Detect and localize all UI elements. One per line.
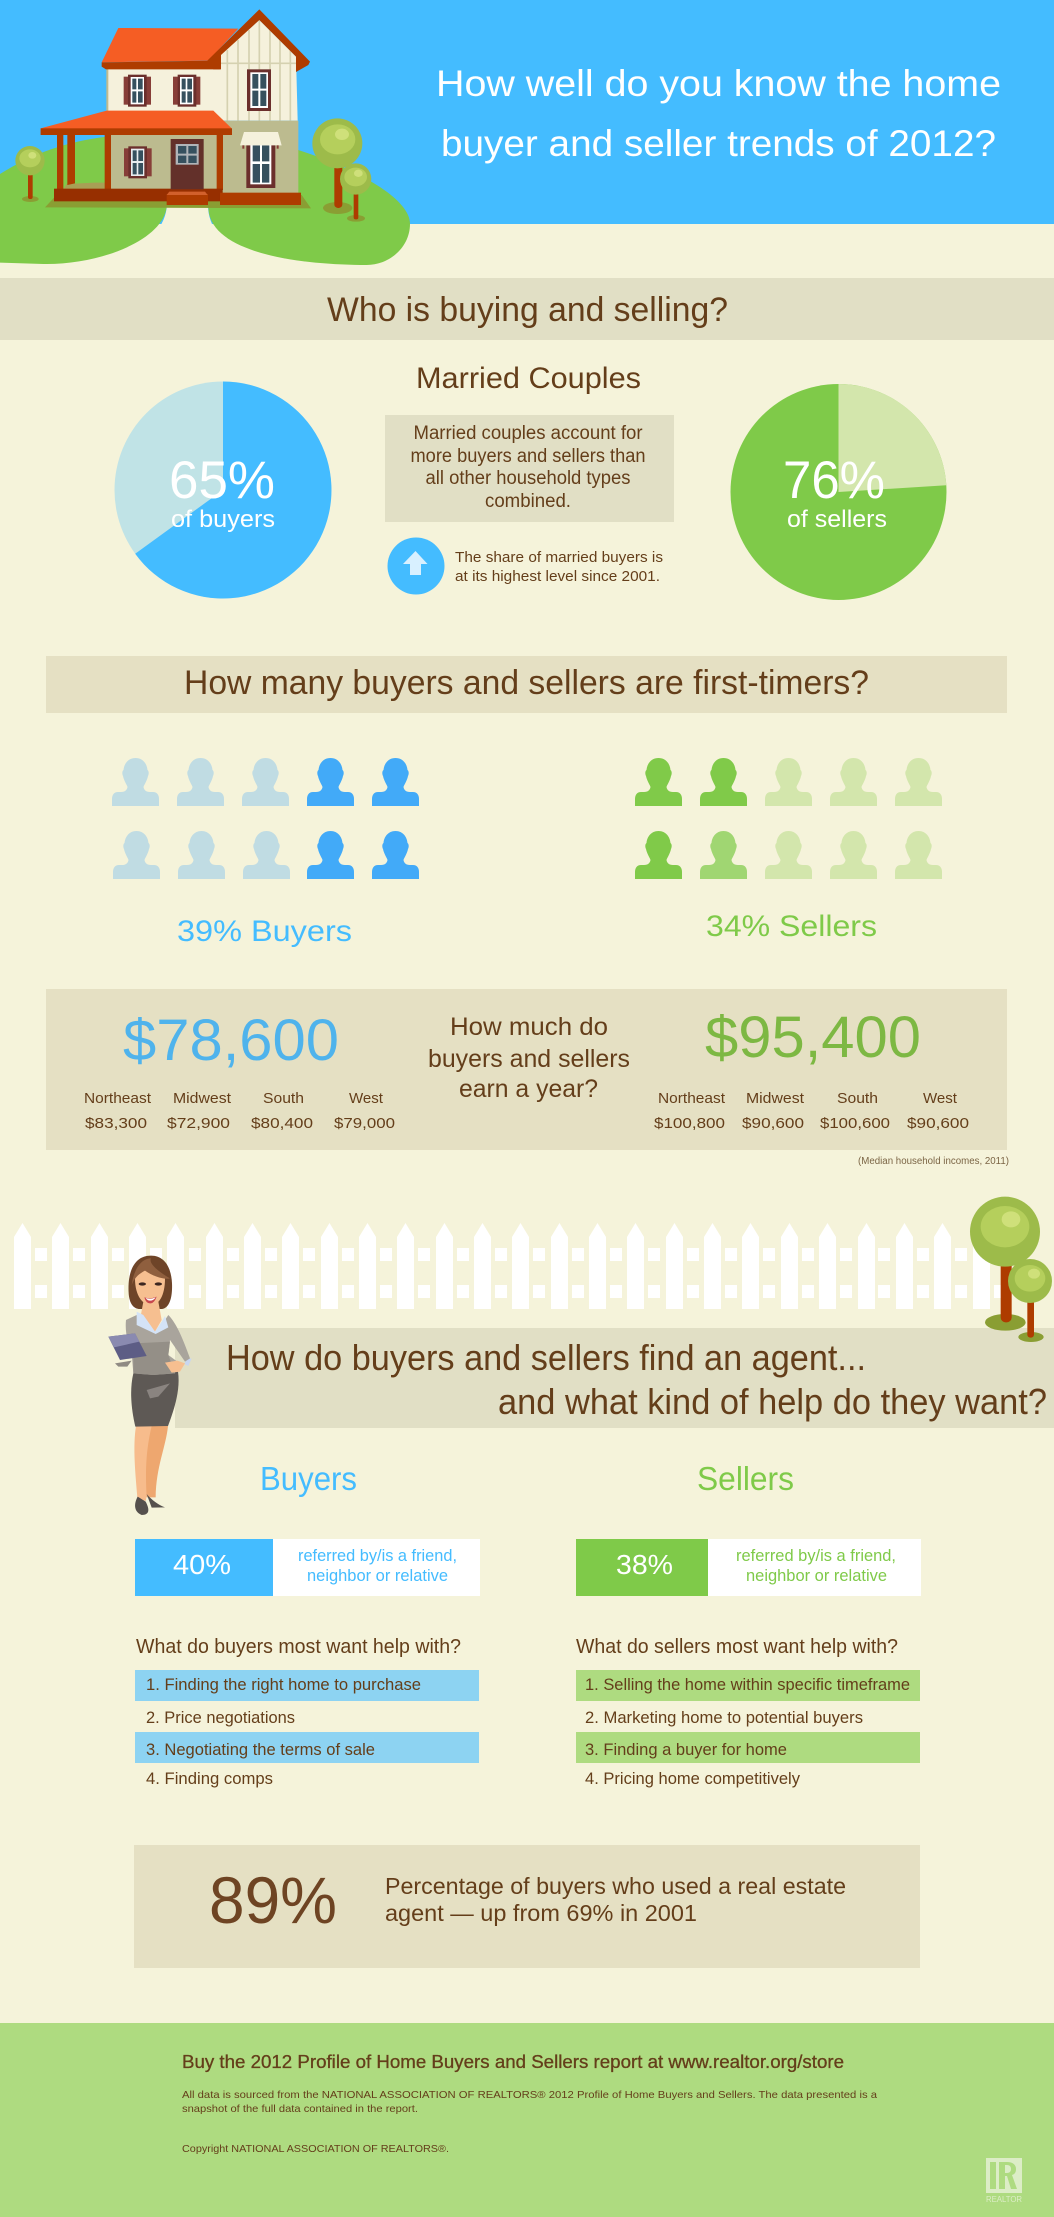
list: what buyers want help with: 2. Price negotiations xyxy=(146,1708,295,1727)
chart: buyers pie 65%: 65% xyxy=(169,451,275,510)
sellers regional incomes: Northeast xyxy=(658,1090,726,1107)
buyers regional incomes: $79,000 xyxy=(334,1115,395,1132)
title: buyer and seller trends of 2012? xyxy=(441,123,996,164)
icon: realtor logo: REALTOR xyxy=(986,2195,1022,2204)
heading: first-timers xyxy=(46,656,1007,713)
sellers regional incomes: West xyxy=(923,1090,958,1107)
list: what buyers want help with: What do buyers most want help with? xyxy=(136,1636,461,1658)
list: what buyers want help with xyxy=(135,1636,479,1788)
callout: sellers 38% referred xyxy=(576,1539,921,1596)
panel: find an agent heading xyxy=(175,1328,1054,1428)
icon: up arrow xyxy=(388,538,444,594)
icon: door xyxy=(171,139,204,189)
sellers income: $95,400 xyxy=(705,1005,921,1070)
sellers regional incomes: $100,800 xyxy=(654,1115,725,1132)
icon: trees on right of fence xyxy=(970,1197,1052,1342)
picket fence xyxy=(14,1223,1006,1309)
title xyxy=(436,63,1001,164)
buyers regional incomes: South xyxy=(263,1090,304,1107)
sellers regional incomes: Midwest xyxy=(746,1090,805,1107)
list: what sellers want help with: What do sellers most want help with? xyxy=(576,1636,898,1658)
buyers regional incomes: Midwest xyxy=(173,1090,232,1107)
title: How well do you know the home xyxy=(436,63,1001,104)
text block: married buyers note xyxy=(455,549,663,585)
callout: sellers 38% referred: 38% xyxy=(616,1549,673,1580)
panel: find an agent heading: How do buyers and sellers find an agent... xyxy=(226,1337,866,1378)
header banner xyxy=(0,0,1054,265)
list: what sellers want help with: 1. Selling the home within specific timeframe xyxy=(585,1675,910,1694)
chart: buyers pie 65% xyxy=(114,382,332,598)
heading: buyers: Buyers xyxy=(260,1460,357,1497)
chart: sellers pie 76%: 76% xyxy=(783,451,885,510)
text block: married couples description: combined. xyxy=(485,491,571,512)
panel: 89% used an agent: agent — up from 69% in 2001 xyxy=(385,1900,697,1926)
heading: married couples: Married Couples xyxy=(416,362,641,395)
list: what sellers want help with xyxy=(576,1636,920,1788)
label: 39% buyers: 39% Buyers xyxy=(177,915,352,948)
icon: big tree right xyxy=(312,118,362,214)
panel: 89% used an agent: 89% xyxy=(209,1863,337,1937)
label: 34% sellers: 34% Sellers xyxy=(706,910,877,943)
list: what sellers want help with: 3. Finding a buyer for home xyxy=(585,1740,787,1759)
panel: footer: Copyright NATIONAL ASSOCIATION OF REALTORS®. xyxy=(182,2143,449,2155)
icon: small tree right xyxy=(340,163,371,222)
panel: footer: Buy the 2012 Profile of Home Buyers and Sellers report at www.realtor.org/store xyxy=(182,2052,844,2072)
callout: buyers 40% referred: referred by/is a friend, xyxy=(298,1546,457,1565)
text block: married buyers note: The share of married buyers is xyxy=(455,549,663,566)
chart: sellers pie 76%: of sellers xyxy=(787,506,887,533)
list: what buyers want help with: 1. Finding the right home to purchase xyxy=(146,1675,421,1694)
buyers regional incomes: Northeast xyxy=(84,1090,152,1107)
panel: household income xyxy=(46,989,1007,1150)
income question: How much do xyxy=(450,1013,608,1041)
text block: married couples description: Married couples account for xyxy=(414,423,643,444)
panel: who is buying and selling heading: Who is buying and selling? xyxy=(327,291,728,329)
sellers regional incomes: $90,600 xyxy=(742,1115,804,1132)
callout: buyers 40% referred: 40% xyxy=(173,1549,231,1580)
list: what buyers want help with: 4. Finding comps xyxy=(146,1769,273,1788)
chart: buyers people icons xyxy=(112,758,419,879)
panel: 89% used an agent xyxy=(134,1845,920,1968)
callout: sellers 38% referred: referred by/is a friend, xyxy=(736,1546,896,1565)
panel: who is buying and selling heading xyxy=(0,278,1054,340)
buyers regional incomes: $72,900 xyxy=(167,1115,230,1132)
chart: sellers pie 76% xyxy=(730,384,946,600)
icon: lower windows xyxy=(124,132,282,188)
text block: married couples description xyxy=(385,415,674,522)
chart: buyers pie 65%: of buyers xyxy=(171,506,275,533)
buyers regional incomes xyxy=(84,1090,395,1132)
panel: 89% used an agent: Percentage of buyers who used a real estate xyxy=(385,1873,846,1899)
list: what sellers want help with: 4. Pricing home competitively xyxy=(585,1769,800,1788)
buyers regional incomes: West xyxy=(349,1090,384,1107)
income question: earn a year? xyxy=(459,1075,598,1103)
heading: sellers: Sellers xyxy=(697,1460,794,1497)
buyers regional incomes: $80,400 xyxy=(251,1115,313,1132)
buyers income: $78,600 xyxy=(123,1008,339,1073)
sellers regional incomes xyxy=(654,1090,969,1132)
list: what sellers want help with: 2. Marketing home to potential buyers xyxy=(585,1708,863,1727)
list: what buyers want help with: 3. Negotiating the terms of sale xyxy=(146,1740,375,1759)
chart: sellers people icons xyxy=(635,758,942,879)
buyers regional incomes: $83,300 xyxy=(85,1115,147,1132)
income question: buyers and sellers xyxy=(428,1045,630,1073)
icon: realtor logo xyxy=(986,2158,1022,2204)
sellers regional incomes: $100,600 xyxy=(820,1115,890,1132)
icon: woman real estate agent xyxy=(108,1256,192,1515)
text block: married couples description: more buyers and sellers than xyxy=(410,446,646,467)
icon: upper windows xyxy=(124,69,271,111)
sellers regional incomes: $90,600 xyxy=(907,1115,969,1132)
callout: buyers 40% referred xyxy=(135,1539,480,1596)
icon: house illustration with lawn and trees xyxy=(0,9,410,265)
panel: footer: snapshot of the full data contained in the report. xyxy=(182,2103,418,2115)
callout: buyers 40% referred: neighbor or relative xyxy=(307,1566,448,1585)
panel: footer xyxy=(0,2023,1054,2217)
text block: married couples description: all other household types xyxy=(426,468,630,489)
panel: footer: All data is sourced from the NATIONAL ASSOCIATION OF REALTORS® 2012 Profile of Home Buyers and Sellers. The data presented is a xyxy=(182,2089,877,2101)
text block: married buyers note: at its highest level since 2001. xyxy=(455,568,660,585)
income question xyxy=(428,1013,630,1103)
icon: small tree left xyxy=(15,146,45,202)
footnote: median incomes: (Median household incomes, 2011) xyxy=(858,1156,1009,1167)
sellers regional incomes: South xyxy=(837,1090,878,1107)
callout: sellers 38% referred: neighbor or relative xyxy=(746,1566,887,1585)
heading: first-timers: How many buyers and sellers are first-timers? xyxy=(184,664,869,702)
